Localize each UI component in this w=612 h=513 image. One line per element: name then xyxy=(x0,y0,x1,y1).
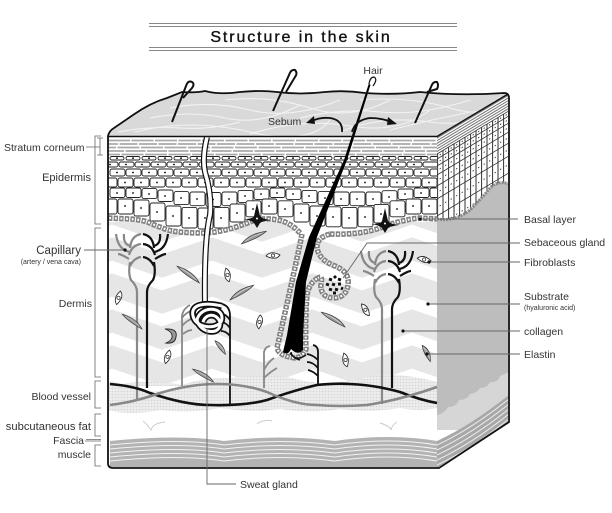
labels left: Fascia xyxy=(53,435,84,447)
leaders right xyxy=(207,219,520,484)
labels left: Capillary xyxy=(36,245,81,257)
melanocytes xyxy=(243,203,399,233)
surface hairs xyxy=(172,70,438,123)
right side face xyxy=(437,90,509,470)
labels left: (artery / vena cava) xyxy=(21,259,81,266)
sebum arrows xyxy=(306,116,397,132)
labels left: Blood vessel xyxy=(31,391,91,403)
labels right: (hyaluronic acid) xyxy=(524,305,575,312)
labels right: Sebaceous gland xyxy=(524,237,605,249)
labels left: Dermis xyxy=(59,298,92,310)
side muscle stripes xyxy=(437,395,509,470)
labels right: Elastin xyxy=(524,349,556,361)
side dermis xyxy=(437,183,509,430)
labels left: Stratum corneum xyxy=(4,142,85,154)
labels right: Basal layer xyxy=(524,214,576,226)
basal layer xyxy=(108,218,437,234)
labels right xyxy=(240,214,605,491)
hair label: Hair xyxy=(363,65,383,77)
labels left: muscle xyxy=(58,449,91,461)
labels right: Substrate xyxy=(524,291,569,303)
side subcutaneous fat xyxy=(437,372,509,430)
epidermis cells xyxy=(102,156,445,229)
hair follicle and sebaceous gland xyxy=(277,234,348,358)
title xyxy=(149,24,457,50)
capillaries left xyxy=(116,234,413,404)
sweat gland xyxy=(193,137,222,332)
epidermis lower mask xyxy=(108,137,437,233)
cube outline xyxy=(108,91,509,468)
leader dots xyxy=(401,217,431,356)
lower dermis fat dots xyxy=(108,375,437,469)
skin cube xyxy=(102,70,509,470)
epidermis front background xyxy=(108,137,437,237)
hair shaft main xyxy=(283,77,376,360)
elastin fibers xyxy=(120,231,435,382)
labels left: subcutaneous fat xyxy=(6,421,92,433)
blood vessels xyxy=(110,384,437,406)
labels right: collagen xyxy=(524,326,563,338)
dermis xyxy=(108,222,437,392)
left brackets xyxy=(85,136,103,466)
title: Structure in the skin xyxy=(210,29,392,46)
labels left: Epidermis xyxy=(42,172,91,184)
capillaries center and follicle xyxy=(182,304,318,405)
labels right: Sweat gland xyxy=(240,479,298,491)
muscle layer xyxy=(110,437,437,467)
fibroblasts xyxy=(114,253,432,367)
capillary leader xyxy=(84,248,127,252)
fat gull marks xyxy=(143,420,397,430)
labels right: Fibroblasts xyxy=(524,257,575,269)
top surface xyxy=(108,91,508,137)
labels left xyxy=(4,142,92,461)
stratum corneum xyxy=(108,140,437,154)
sebum label: Sebum xyxy=(268,116,302,128)
